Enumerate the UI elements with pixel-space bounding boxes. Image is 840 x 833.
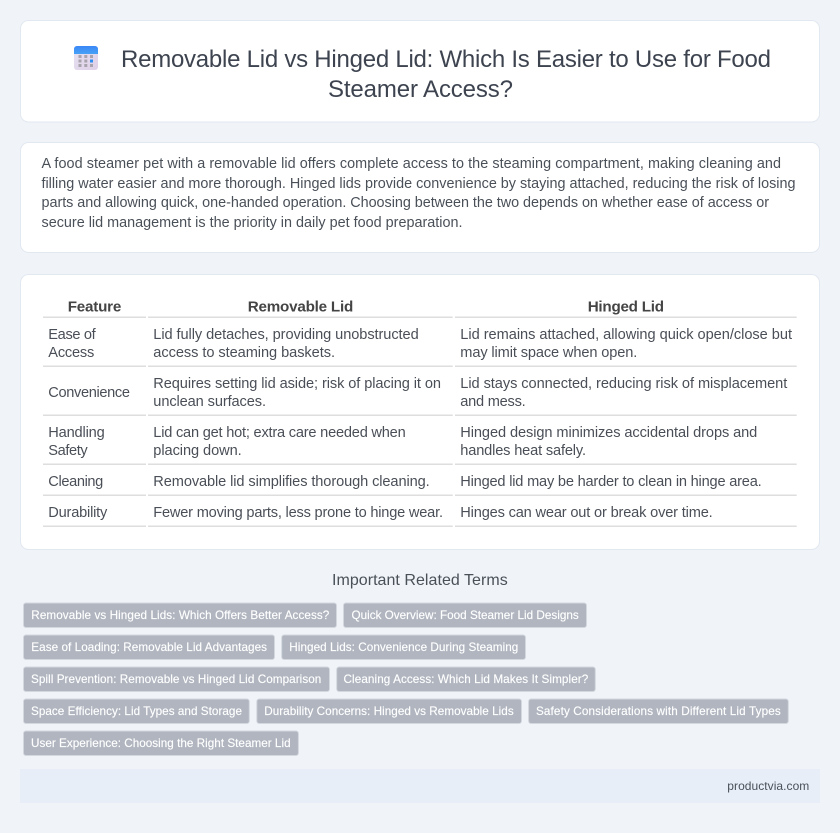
table header: Removable Lid xyxy=(248,298,353,315)
table row: convenience: Requires setting lid aside; risk of placing it on xyxy=(153,376,441,392)
tag: Ease of Loading: Removable Lid Advantages xyxy=(31,641,267,654)
table row: durability: Fewer moving parts, less prone to hinge wear. xyxy=(153,505,443,521)
tag: Hinged Lids: Convenience During Steaming xyxy=(289,641,518,654)
table row: durability: Hinges can wear out or break over time. xyxy=(460,505,713,521)
table row: convenience: Convenience xyxy=(48,385,130,401)
table header xyxy=(68,298,664,315)
table row: ease of access xyxy=(48,327,792,361)
table row: cleaning: Removable lid simplifies thorough cleaning. xyxy=(153,474,430,490)
table row: convenience: Lid stays connected, reducing risk of misplacement xyxy=(460,376,787,392)
table row: ease of access: Ease of xyxy=(48,327,97,343)
table row: durability: Durability xyxy=(48,505,108,521)
panel: comparison table xyxy=(20,274,820,550)
table row: cleaning xyxy=(48,474,762,490)
table row: ease of access: Lid fully detaches, providing unobstructed xyxy=(153,327,419,343)
tag xyxy=(529,699,788,724)
tag: Spill Prevention: Removable vs Hinged Lid Comparison xyxy=(31,673,321,686)
heading: important related terms: Important Related Terms xyxy=(332,572,508,589)
table row: ease of access: Lid remains attached, allowing quick open/close but xyxy=(460,327,792,343)
table row: convenience xyxy=(48,376,787,410)
table row: handling safety: Handling xyxy=(48,425,105,441)
tag: Space Efficiency: Lid Types and Storage xyxy=(31,705,242,718)
panel: related terms tags xyxy=(24,603,788,756)
tag xyxy=(24,603,336,628)
tag: Safety Considerations with Different Lid Types xyxy=(536,705,781,718)
icon: calendar xyxy=(74,46,98,70)
table row: ease of access: Access xyxy=(48,345,94,361)
text block: introduction: A food steamer pet with a removable lid offers complete access to the steaming compartment, making cleaning and xyxy=(42,156,781,172)
tag xyxy=(344,603,586,628)
table row: handling safety xyxy=(48,425,757,459)
footer xyxy=(20,769,820,803)
table row: convenience: and mess. xyxy=(460,394,526,410)
tag xyxy=(24,635,274,660)
tag: Removable vs Hinged Lids: Which Offers Better Access? xyxy=(31,609,330,622)
table row: cleaning: Hinged lid may be harder to clean in hinge area. xyxy=(460,474,762,490)
table header: Feature xyxy=(68,298,121,315)
panel: header xyxy=(20,20,820,122)
table row: ease of access: access to steaming baskets. xyxy=(153,345,335,361)
text block: introduction xyxy=(42,156,796,231)
tag: User Experience: Choosing the Right Steamer Lid xyxy=(31,737,291,750)
tag: Durability Concerns: Hinged vs Removable Lids xyxy=(264,705,514,718)
table header: Hinged Lid xyxy=(588,298,664,315)
table row: handling safety: Hinged design minimizes accidental drops and xyxy=(460,425,757,441)
table row: durability xyxy=(48,505,713,521)
table row: handling safety: Lid can get hot; extra care needed when xyxy=(153,425,406,441)
table row: handling safety: Safety xyxy=(48,443,88,459)
text block: introduction: parts and allowing quick, one-handed operation. Choosing between the two depends on whether ease of access or xyxy=(42,195,769,211)
text block: introduction: secure lid management is the priority in daily pet food preparation. xyxy=(42,215,462,231)
tag xyxy=(282,635,526,660)
title xyxy=(121,46,771,103)
tag xyxy=(24,731,298,756)
tag: Quick Overview: Food Steamer Lid Designs xyxy=(352,609,579,622)
tag xyxy=(337,667,595,692)
title: Steamer Access? xyxy=(328,76,513,103)
text block: introduction: filling water easier and more thorough. Hinged lids provide convenience by staying attached, reducing the risk of losing xyxy=(42,176,796,192)
tag xyxy=(257,699,522,724)
table row: convenience: unclean surfaces. xyxy=(153,394,266,410)
tag: Cleaning Access: Which Lid Makes It Simpler? xyxy=(344,673,589,686)
tag xyxy=(24,667,330,692)
title: Removable Lid vs Hinged Lid: Which Is Easier to Use for Food xyxy=(121,46,771,73)
table row: cleaning: Cleaning xyxy=(48,474,103,490)
table row: ease of access: may limit space when open. xyxy=(460,345,637,361)
tag xyxy=(24,699,249,724)
panel: introduction xyxy=(20,142,820,252)
table row: handling safety: handles heat safely. xyxy=(460,443,586,459)
footer: productvia.com xyxy=(727,779,809,793)
table row: handling safety: placing down. xyxy=(153,443,242,459)
